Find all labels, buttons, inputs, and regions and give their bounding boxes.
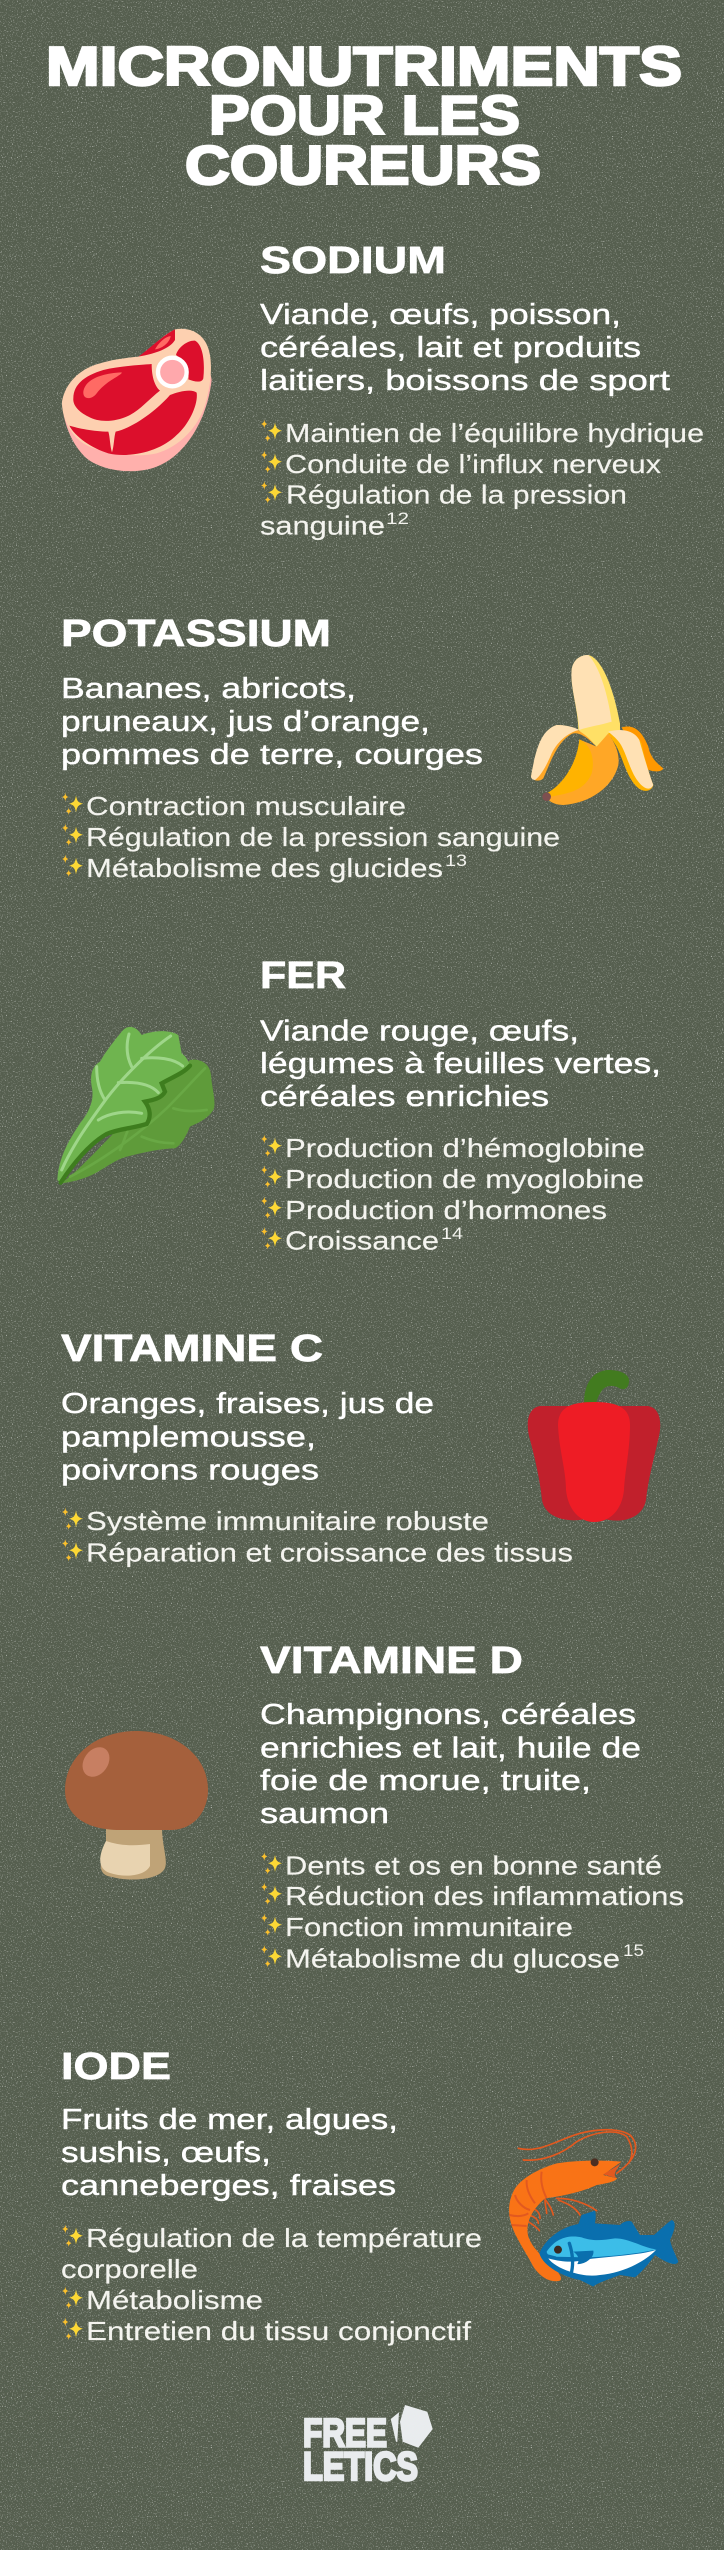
list: vitamine d benefits: Réduction des inflammations: [285, 1881, 684, 1911]
text block: vitamine c food sources: pamplemousse,: [61, 1422, 316, 1454]
text block: fer food sources: [260, 1016, 661, 1113]
panel: vitamine c: [61, 1328, 660, 1568]
icon: leafy green: [57, 1027, 214, 1183]
heading: sodium: SODIUM: [260, 240, 446, 282]
list: fer benefits: Croissance: [285, 1226, 439, 1256]
title: COUREURS: [185, 134, 541, 196]
text block: potassium food sources: Bananes, abricots,: [61, 673, 356, 705]
panel: fer: [57, 955, 661, 1256]
list: iode benefits: corporelle: [61, 2254, 198, 2284]
list: vitamine d benefits: [261, 1850, 684, 1974]
list: potassium benefits: Régulation de la pression sanguine: [86, 822, 560, 852]
heading: fer: FER: [260, 955, 346, 997]
text block: sodium food sources: céréales, lait et produits: [260, 332, 641, 364]
title: [46, 35, 682, 196]
text block: fer food sources: Viande rouge, œufs,: [260, 1016, 579, 1048]
list: fer benefits: Production d’hormones: [285, 1195, 607, 1225]
panel: sodium: [62, 240, 704, 540]
text block: vitamine d food sources: enrichies et lait, huile de: [260, 1732, 641, 1764]
text block: vitamine c food sources: poivrons rouges: [61, 1454, 319, 1486]
text block: sodium food sources: [260, 299, 670, 397]
text block: vitamine d food sources: saumon: [260, 1798, 389, 1830]
list: iode benefits: Entretien du tissu conjonctif: [86, 2316, 472, 2346]
text block: fer food sources: céréales enrichies: [260, 1081, 549, 1113]
list: iode benefits: Métabolisme: [86, 2285, 263, 2315]
list: vitamine d benefits: 15: [623, 1941, 644, 1960]
list: potassium benefits: 13: [445, 851, 467, 870]
panel: vitamine d: [65, 1640, 684, 1974]
list: fer benefits: Production de myoglobine: [285, 1164, 644, 1194]
text block: sodium food sources: laitiers, boissons de sport: [260, 365, 670, 397]
list: potassium benefits: [62, 791, 560, 883]
list: vitamine c benefits: Système immunitaire robuste: [86, 1506, 489, 1536]
logo: freeletics: FREE: [303, 2412, 387, 2456]
list: potassium benefits: Métabolisme des glucides: [86, 853, 443, 883]
text block: vitamine c food sources: [61, 1388, 434, 1486]
list: sodium benefits: Régulation de la pression: [286, 480, 627, 510]
text block: vitamine d food sources: [260, 1699, 641, 1830]
list: potassium benefits: Contraction musculaire: [86, 791, 406, 821]
list: fer benefits: [261, 1133, 645, 1256]
text block: potassium food sources: [61, 673, 483, 771]
text block: iode food sources: Fruits de mer, algues,: [61, 2104, 398, 2136]
list: sodium benefits: Maintien de l’équilibre hydrique: [285, 418, 704, 448]
list: fer benefits: Production d’hémoglobine: [285, 1133, 645, 1163]
list: vitamine d benefits: Fonction immunitaire: [285, 1912, 573, 1942]
title: POUR LES: [209, 84, 520, 146]
title: MICRONUTRIMENTS: [46, 35, 682, 97]
text block: iode food sources: sushis, œufs,: [61, 2137, 271, 2169]
text block: fer food sources: légumes à feuilles vertes,: [260, 1048, 661, 1080]
text block: vitamine d food sources: Champignons, céréales: [260, 1699, 636, 1731]
list: vitamine d benefits: Dents et os en bonne santé: [285, 1850, 662, 1880]
list: sodium benefits: 12: [386, 509, 409, 528]
list: vitamine c benefits: Réparation et croissance des tissus: [86, 1538, 573, 1568]
heading: vitamine c: VITAMINE C: [61, 1328, 323, 1370]
list: sodium benefits: [260, 418, 704, 540]
panel: potassium: [61, 613, 663, 883]
text block: sodium food sources: Viande, œufs, poisson,: [260, 299, 621, 331]
logo: freeletics: [303, 2405, 433, 2489]
icon: banana: [531, 655, 663, 805]
list: vitamine c benefits: [62, 1506, 573, 1568]
icon: shrimp and fish: [509, 2130, 678, 2287]
panel: iode: [61, 2046, 678, 2346]
text block: potassium food sources: pommes de terre, courges: [61, 739, 483, 771]
icon: meat steak: [62, 329, 212, 471]
text block: vitamine d food sources: foie de morue, truite,: [260, 1765, 591, 1797]
icon: mushroom: [65, 1731, 208, 1880]
icon: red bell pepper: [528, 1370, 660, 1522]
text block: iode food sources: [61, 2104, 398, 2202]
list: sodium benefits: sanguine: [260, 510, 385, 540]
heading: potassium: POTASSIUM: [61, 613, 331, 655]
text block: potassium food sources: pruneaux, jus d’orange,: [61, 706, 430, 738]
list: sodium benefits: Conduite de l’influx nerveux: [285, 449, 661, 479]
list: fer benefits: 14: [441, 1224, 463, 1243]
list: iode benefits: [61, 2223, 482, 2346]
text block: iode food sources: canneberges, fraises: [61, 2170, 396, 2202]
logo: freeletics: LETICS: [303, 2445, 418, 2489]
heading: iode: IODE: [61, 2046, 171, 2088]
text block: vitamine c food sources: Oranges, fraises, jus de: [61, 1388, 434, 1420]
heading: vitamine d: VITAMINE D: [260, 1640, 523, 1682]
list: iode benefits: Régulation de la température: [86, 2223, 482, 2253]
list: vitamine d benefits: Métabolisme du glucose: [285, 1944, 620, 1974]
